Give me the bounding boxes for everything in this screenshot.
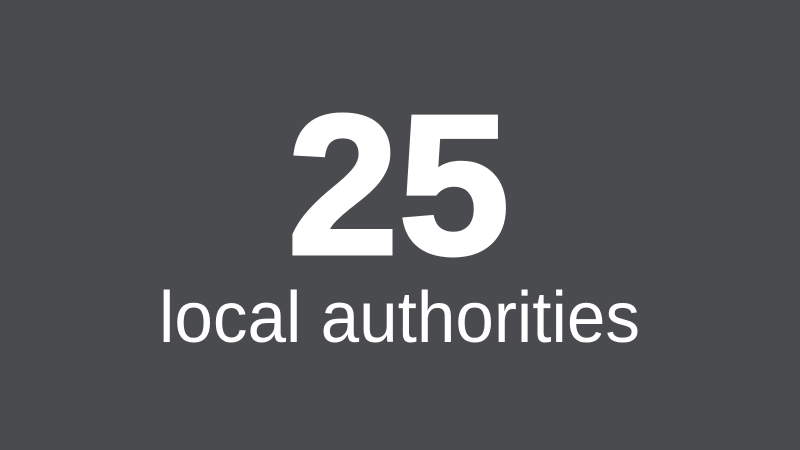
label: local authorities: local authorities <box>159 278 640 358</box>
big number: 25: 25 <box>288 74 510 296</box>
